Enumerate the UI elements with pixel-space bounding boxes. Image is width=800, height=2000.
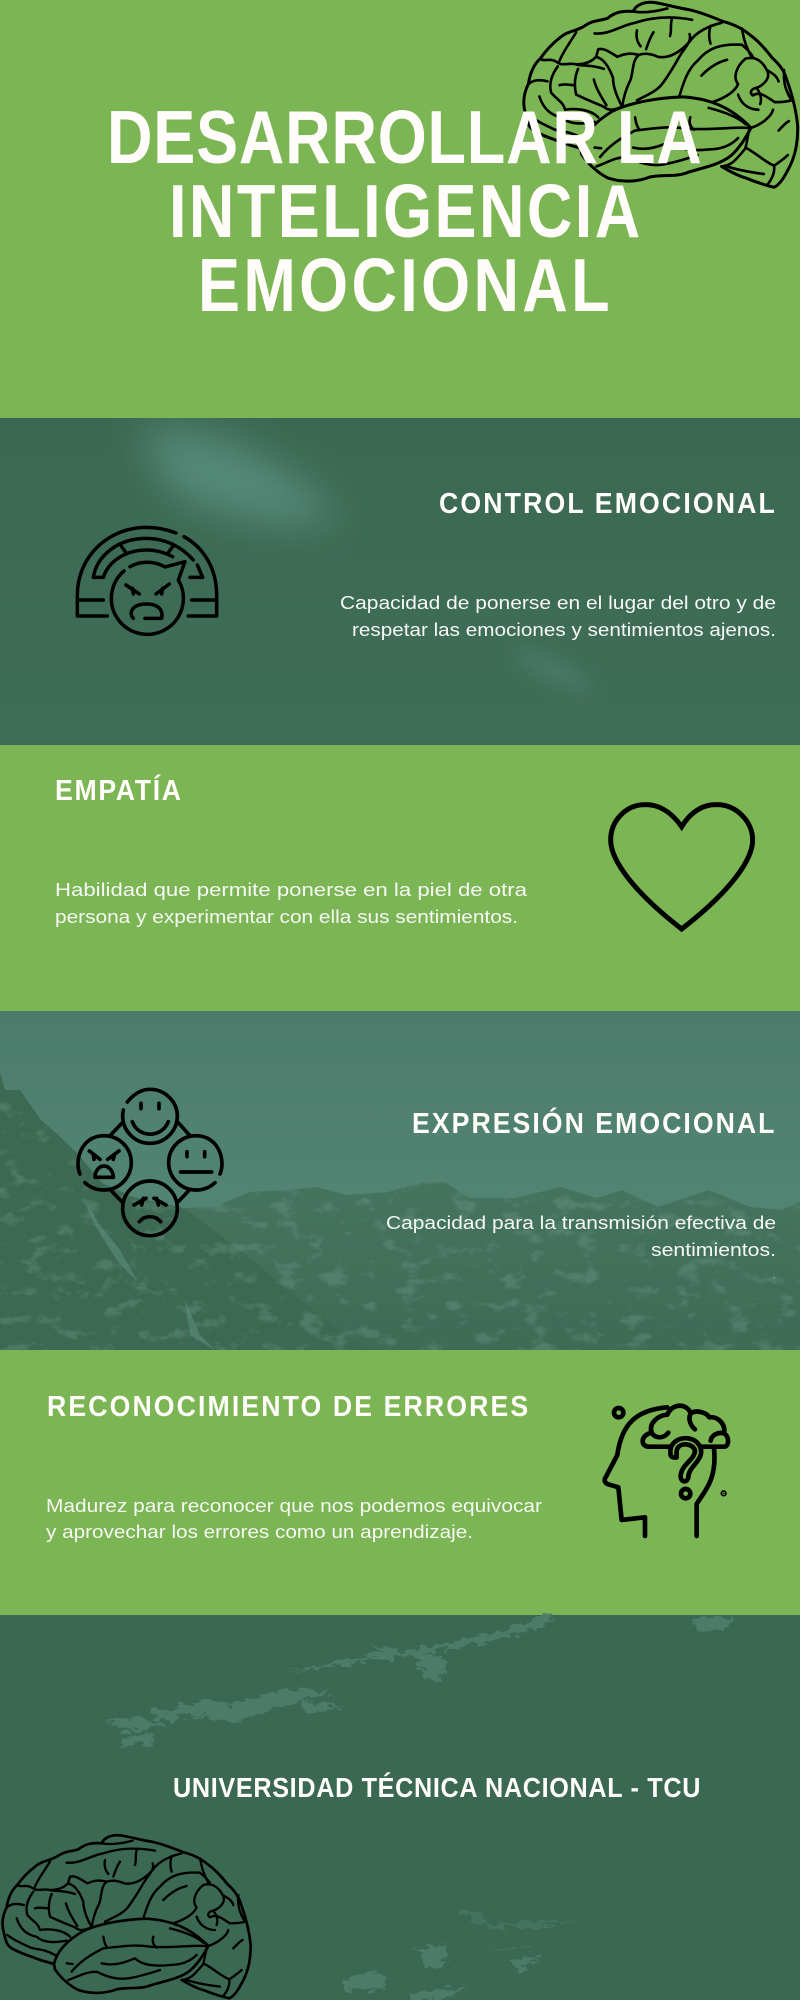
icon: heart: [611, 805, 753, 929]
title: INTELIGENCIA: [169, 169, 640, 253]
footer credit: UNIVERSIDAD TÉCNICA NACIONAL - TCU: [173, 1772, 700, 1803]
description: respetar las emociones y sentimientos ajenos.: [352, 620, 776, 640]
description: y aprovechar los errores como un aprendizaje.: [46, 1522, 473, 1542]
heading: EXPRESIÓN EMOCIONAL: [412, 1107, 774, 1139]
header background: [0, 0, 800, 418]
panel: footer: [0, 1615, 800, 2000]
title: DESARROLLAR LA: [107, 95, 702, 179]
heading: EMPATÍA: [55, 774, 181, 806]
description: sentimientos.: [651, 1240, 776, 1260]
description: persona y experimentar con ella sus sentimientos.: [55, 907, 518, 927]
description: .: [773, 1271, 775, 1280]
icon: head with question mark: [605, 1406, 728, 1536]
description: Capacidad para la transmisión efectiva de: [386, 1213, 776, 1233]
title: [107, 95, 702, 327]
title: EMOCIONAL: [198, 243, 610, 327]
icon: angry gauge: [77, 527, 217, 634]
footer background: [0, 1615, 800, 2000]
panel: control emocional: [0, 418, 800, 745]
description: [46, 1496, 542, 1542]
brain illustration bottom left: [2, 1835, 251, 1998]
panel: empatia: [0, 745, 800, 1011]
description: [340, 593, 776, 640]
control panel background: [0, 418, 800, 745]
description: [55, 880, 528, 927]
icon: four emotion faces: [78, 1089, 222, 1236]
heading: RECONOCIMIENTO DE ERRORES: [47, 1390, 528, 1422]
description: Capacidad de ponerse en el lugar del otro y de: [340, 593, 776, 613]
panel: expresion emocional: [0, 1011, 800, 1350]
panel: title header: [0, 0, 800, 418]
description: Madurez para reconocer que nos podemos equivocar: [46, 1496, 542, 1516]
description: Habilidad que permite ponerse en la piel de otra: [55, 880, 528, 900]
heading: CONTROL EMOCIONAL: [439, 487, 775, 519]
brain illustration top right: [524, 2, 798, 187]
reconocimiento background: [0, 1350, 800, 1615]
description: [386, 1213, 776, 1280]
empatia background: [0, 745, 800, 1011]
mountain background: [0, 1011, 800, 1350]
panel: reconocimiento de errores: [0, 1350, 800, 1615]
